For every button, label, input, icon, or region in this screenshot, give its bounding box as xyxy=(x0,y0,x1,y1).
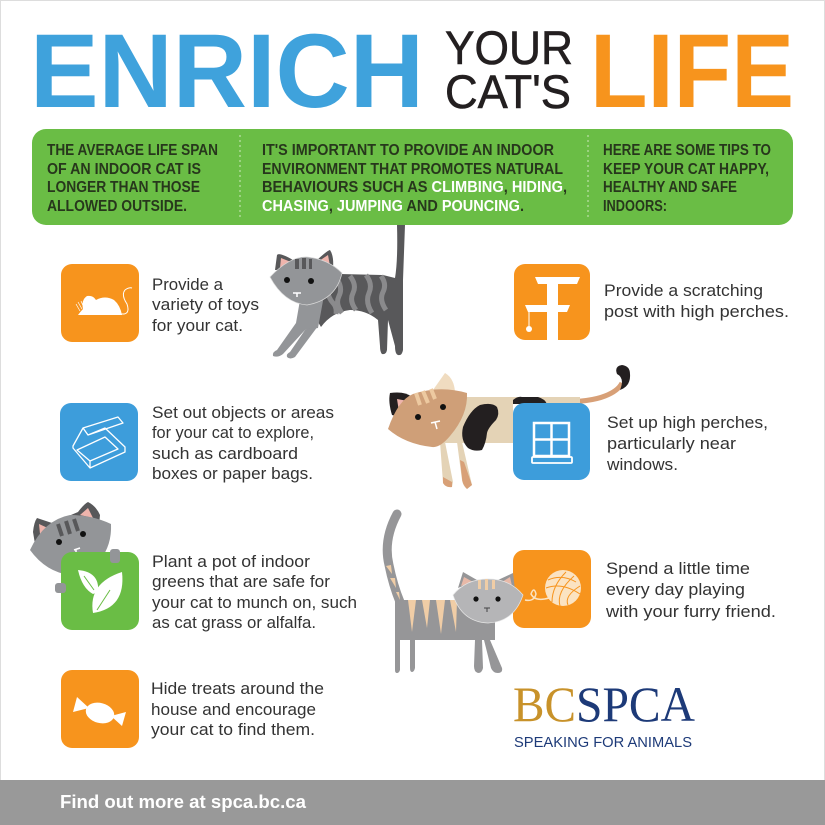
tip text: toys: Provide a xyxy=(152,276,224,294)
icon: cardboard box tile xyxy=(60,403,138,481)
text: life span: OF AN INDOOR CAT IS xyxy=(47,161,201,178)
text: life span: ALLOWED OUTSIDE. xyxy=(47,198,187,215)
title: CAT'S xyxy=(445,65,571,118)
tip text: scratching post xyxy=(604,282,789,321)
title: YOUR xyxy=(445,21,573,74)
tip text: explore: Set out objects or areas xyxy=(152,404,334,422)
tip text: explore xyxy=(152,404,334,483)
logo: BCSPCA xyxy=(513,676,695,751)
text: life span xyxy=(47,142,218,215)
tip text: perches: particularly near xyxy=(607,435,737,453)
tip text: explore: boxes or paper bags. xyxy=(152,465,313,483)
panel: intro banner xyxy=(32,129,793,225)
tip text: treats xyxy=(151,680,324,739)
text: tips intro: HEALTHY AND SAFE xyxy=(603,179,737,196)
text: tips intro: KEEP YOUR CAT HAPPY, xyxy=(603,161,769,178)
illustration: cat peeking over plant tile xyxy=(30,502,111,575)
text: indoor environment: ENVIRONMENT THAT PROMOTES NATURAL xyxy=(262,161,563,178)
icon: scratching post tile xyxy=(514,264,590,340)
icon: mouse toy tile xyxy=(61,264,139,342)
title: ENRICH xyxy=(30,13,424,130)
icon: window tile xyxy=(513,403,590,480)
tip text: treats: Hide treats around the xyxy=(151,680,324,698)
tip text: perches xyxy=(606,414,768,474)
text: tips intro: HERE ARE SOME TIPS TO xyxy=(603,142,771,159)
tip text: scratching post: post with high perches. xyxy=(604,303,789,321)
title xyxy=(30,13,794,130)
tip text: treats: house and encourage xyxy=(151,701,316,719)
text: indoor environment: BEHAVIOURS SUCH AS CLIMBING, HIDING, xyxy=(262,179,567,196)
text: life span: THE AVERAGE LIFE SPAN xyxy=(47,142,218,159)
text: tips intro: INDOORS: xyxy=(603,198,667,215)
tip text: playing: every day playing xyxy=(606,581,745,599)
tip text: greens xyxy=(152,553,357,632)
footer bar: Find out more at spca.bc.ca xyxy=(60,792,307,812)
illustration: grey tabby cat with tail up xyxy=(270,225,405,358)
illustration: striped grey cat xyxy=(386,514,523,673)
title: LIFE xyxy=(590,13,794,130)
tip text: perches: Set up high perches, xyxy=(607,414,768,432)
tip text: explore: for your cat to explore, xyxy=(152,424,314,442)
illustration: cat paws on plant tile xyxy=(55,549,120,593)
tip text: playing xyxy=(605,560,776,621)
illustration: calico cat xyxy=(388,365,630,489)
tip text: toys: for your cat. xyxy=(152,317,243,335)
logo: BCSPCA: BC xyxy=(513,676,576,732)
icon: candy tile xyxy=(61,670,139,748)
text: indoor environment: CHASING, JUMPING AND POUNCING. xyxy=(262,198,524,215)
tip text: greens: greens that are safe for xyxy=(152,573,331,591)
tip text: playing: with your furry friend. xyxy=(605,603,776,621)
tip text: scratching post: Provide a scratching xyxy=(604,282,763,300)
icon: leaves tile xyxy=(61,552,139,630)
tip text: greens: your cat to munch on, such xyxy=(152,594,357,612)
tip text: treats: your cat to find them. xyxy=(151,721,315,739)
tip text: greens: as cat grass or alfalfa. xyxy=(152,614,316,632)
text: tips intro xyxy=(603,142,771,215)
logo: BCSPCA: SPCA xyxy=(576,676,695,732)
tip text: greens: Plant a pot of indoor xyxy=(152,553,311,571)
text: life span: LONGER THAN THOSE xyxy=(47,179,200,196)
tip text: perches: windows. xyxy=(606,456,678,474)
icon: yarn ball tile xyxy=(513,550,591,628)
tip text: explore: such as cardboard xyxy=(152,445,298,463)
logo: BCSPCA: SPEAKING FOR ANIMALS xyxy=(514,734,692,751)
tip text: playing: Spend a little time xyxy=(606,560,750,578)
text: indoor environment: IT'S IMPORTANT TO PROVIDE AN INDOOR xyxy=(262,142,554,159)
footer bar xyxy=(0,780,825,825)
text: indoor environment xyxy=(262,142,567,215)
tip text: toys xyxy=(152,276,259,335)
tip text: toys: variety of toys xyxy=(152,296,259,314)
